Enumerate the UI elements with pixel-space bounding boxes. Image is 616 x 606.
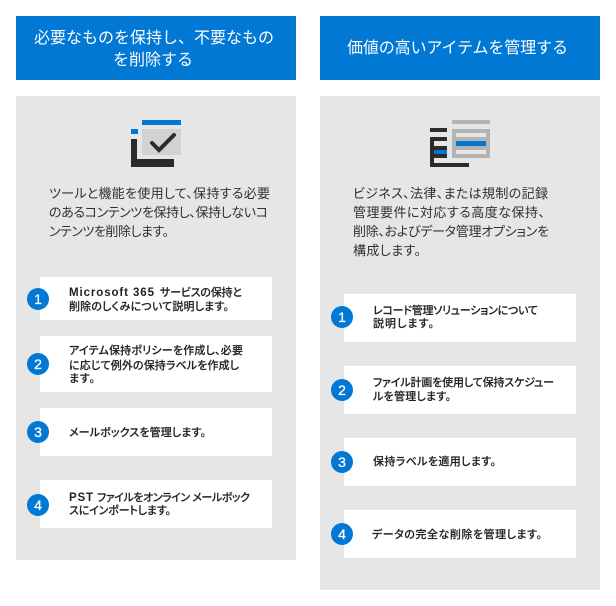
badge: right 1	[331, 306, 353, 328]
step text: left 1	[69, 285, 242, 313]
heading text: left	[34, 29, 274, 69]
heading text: left: を削除する	[113, 51, 193, 69]
card: left step 1	[40, 277, 272, 320]
badge: right 2	[331, 379, 353, 401]
step text: right 1: 説明します。	[373, 316, 434, 330]
card: right step 3	[344, 438, 576, 486]
badge: left 3: 3	[34, 424, 42, 440]
badge: right 3	[331, 451, 353, 473]
card: left step 3	[40, 408, 272, 456]
card: right step 1	[344, 294, 576, 342]
text block: left description	[49, 186, 270, 239]
step text: left 1: 削除のしくみについて説明します。	[69, 299, 229, 313]
icon: records management	[430, 120, 490, 167]
text block: left description: のあるコンテンツを保持し、保持しないコ	[49, 205, 268, 220]
step text: left 1: Microsoft 365	[69, 287, 155, 299]
step text: left 1: サービスの保持と	[160, 285, 242, 299]
step text: left 2: ます。	[69, 372, 95, 385]
step text: left 2: アイテム保持ポリシーを作成し、必要	[69, 343, 243, 357]
heading: left column background	[16, 16, 296, 80]
step text: left 4: スにインポートします。	[68, 504, 171, 517]
text block: left description: ンテンツを削除します。	[49, 224, 169, 239]
card: left step 4	[40, 480, 272, 528]
text block: right description: ビジネス、法律、または規制の記録	[353, 186, 548, 201]
step text: right 1: レコード管理ソリューションについて	[373, 303, 538, 317]
step text: right 2	[372, 375, 554, 403]
text block: right description: 管理要件に対応する高度な保持、	[353, 205, 545, 220]
card: right step 2	[344, 366, 576, 414]
badge: left 1: 1	[34, 291, 42, 307]
heading text: right: 価値の高いアイテムを管理する	[347, 39, 568, 57]
heading: right column background	[320, 16, 600, 80]
badge: left 4	[27, 494, 49, 516]
badge: right 1: 1	[338, 309, 346, 325]
badge: left 3	[27, 421, 49, 443]
badge: left 2	[27, 353, 49, 375]
step text: right 2: ファイル計画を使用して保持スケジュー	[373, 375, 554, 389]
text block: right description: 構成します。	[353, 243, 421, 258]
panel: left background	[16, 96, 296, 560]
step text: left 2: に応じて例外の保持ラベルを作成し	[69, 358, 239, 372]
step text: left 4: ファイルをオンライン メールボック	[97, 491, 250, 504]
badge: left 1	[27, 288, 49, 310]
badge: right 4: 4	[338, 526, 346, 542]
heading text: left: 必要なものを保持し、不要なもの	[34, 29, 274, 47]
step text: right 4: データの完全な削除を管理します。	[372, 527, 542, 541]
step text: left 3: メールボックスを管理します。	[69, 425, 206, 439]
text block: right description: 削除、およびデータ管理オプションを	[353, 224, 549, 239]
card: left step 2	[40, 336, 272, 392]
step text: right 3: 保持ラベルを適用します。	[373, 454, 496, 468]
card: right step 4	[344, 510, 576, 558]
panel: right background	[320, 96, 600, 590]
badge: right 4	[331, 523, 353, 545]
text block: left description: ツールと機能を使用して、保持する必要	[49, 186, 270, 201]
step text: left 4	[68, 491, 250, 517]
badge: left 4: 4	[34, 497, 42, 513]
badge: right 3: 3	[338, 454, 346, 470]
step text: left 4: PST	[69, 492, 93, 504]
step text: left 2	[69, 343, 243, 385]
badge: left 2: 2	[34, 356, 42, 372]
step text: right 1	[373, 303, 538, 330]
step text: right 2: ルを管理します。	[372, 389, 451, 403]
text block: right description	[353, 186, 549, 258]
icon: checkmark retention	[131, 120, 181, 167]
badge: right 2: 2	[338, 382, 346, 398]
